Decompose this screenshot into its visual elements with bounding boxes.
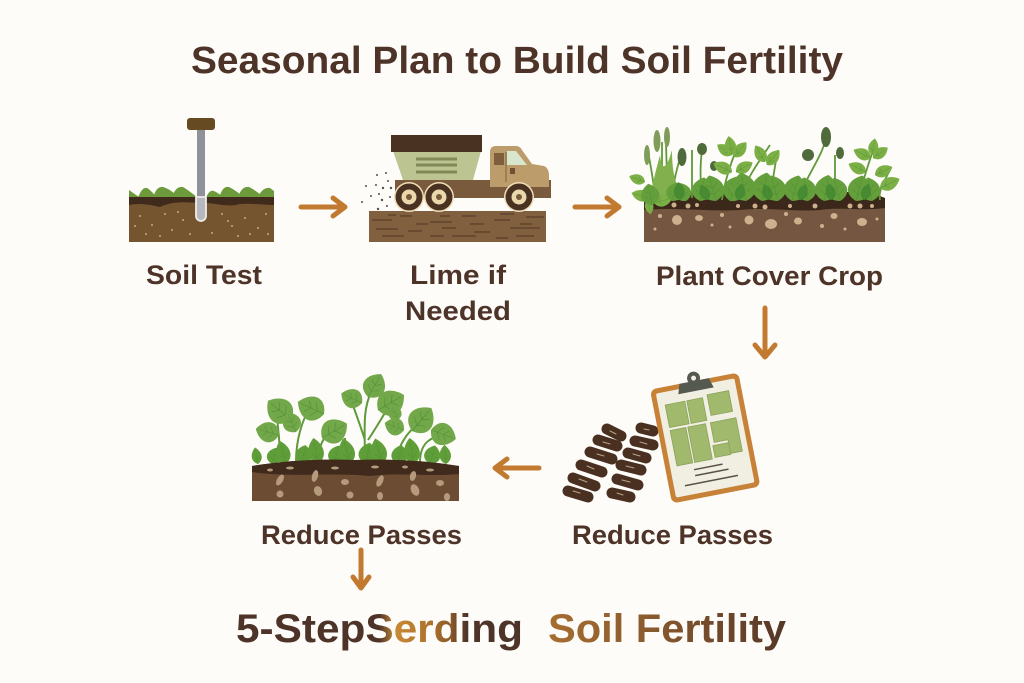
step 2: lime spreader truck illustration: [361, 135, 551, 242]
bottom heading: [236, 607, 787, 651]
wheels: [394, 182, 534, 212]
label: plant cover crop: Plant Cover Crop: [656, 261, 883, 291]
title: Seasonal Plan to Build Soil Fertility: [191, 40, 843, 82]
bottom heading: 5-StepSerding: [236, 607, 523, 651]
label: reduce passes right: Reduce Passes: [572, 520, 773, 550]
label: reduce passes left: Reduce Passes: [261, 520, 462, 550]
step 3: cover crop illustration: [628, 127, 902, 242]
lime dust: [361, 172, 392, 210]
grass fans: [650, 150, 684, 200]
large leaves: [253, 369, 460, 449]
bottom heading: Soil Fertility: [548, 607, 787, 651]
hopper: [391, 135, 482, 180]
low foliage: [250, 436, 452, 466]
soil block: [129, 197, 274, 242]
grass strip: [129, 187, 274, 198]
arrow 3: [755, 308, 775, 357]
step 5: plants in soil illustration: [250, 369, 460, 501]
label: lime if needed: Lime if: [410, 260, 507, 290]
label: lime if needed: [405, 260, 511, 326]
cover crop dark leaves: [673, 182, 873, 202]
cover crop light leaves: [628, 135, 902, 215]
plants soil: [252, 460, 459, 501]
clipboard: [648, 363, 760, 504]
label: lime if needed: Needed: [405, 296, 511, 326]
arrow 1: [301, 198, 345, 216]
note lines: [682, 462, 738, 486]
soil probe: [187, 118, 215, 221]
tire tracks: [568, 428, 653, 497]
arrow 5: [353, 550, 369, 588]
cover crop mass: [639, 171, 882, 207]
clipboard clip: [675, 368, 714, 394]
cab: [490, 146, 549, 187]
field map: [665, 390, 743, 466]
arrow 4: [495, 459, 539, 477]
chassis: [395, 180, 551, 198]
cover crop stems: [648, 135, 890, 200]
step 4: clipboard and tire tracks illustration: [568, 363, 760, 504]
plant stems: [276, 390, 446, 462]
arrow 2: [575, 198, 619, 216]
label: soil test: Soil Test: [146, 260, 262, 290]
tall seed heads: [644, 127, 844, 171]
cover crop soil: [644, 192, 885, 242]
step 1: soil test illustration: [129, 118, 274, 242]
field soil: [369, 211, 546, 242]
